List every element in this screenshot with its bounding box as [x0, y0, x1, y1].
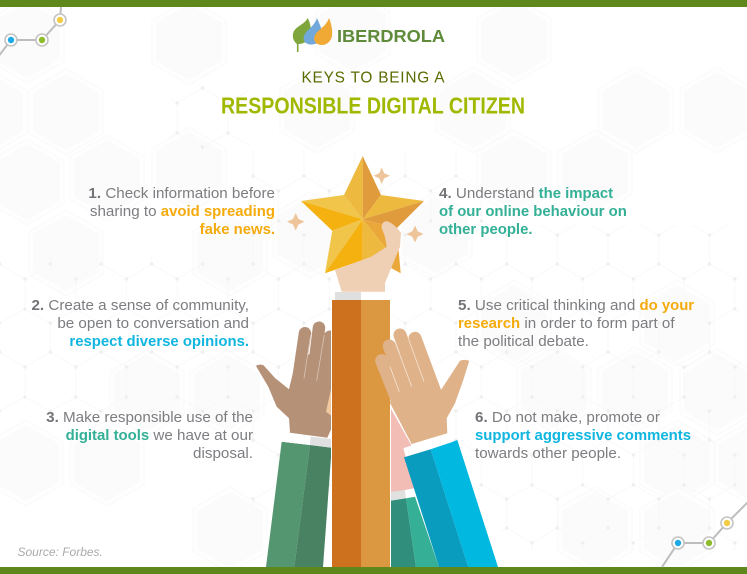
blue sleeve [403, 433, 498, 567]
text block 4: of our online behaviour on [439, 204, 627, 220]
text block 1 [88, 185, 275, 238]
pink forearm [390, 407, 414, 492]
text block 5: the political debate. [458, 333, 589, 350]
text block 2: respect diverse opinions. [69, 334, 249, 350]
icon: leaf and drops [293, 18, 332, 52]
text block 4: other people. [439, 222, 532, 238]
icon: star [301, 156, 424, 273]
peach arm sliver [326, 386, 332, 416]
central orange sleeve [331, 299, 391, 567]
icon: centre hand [335, 221, 401, 292]
text block 3: digital tools we have at our [66, 427, 253, 444]
text block 4: 4. Understand the impact [439, 185, 613, 202]
text block 5: 5. Use critical thinking and do your [458, 297, 694, 314]
text block 1: sharing to avoid spreading [90, 203, 275, 220]
green sleeve [266, 434, 332, 567]
icon: sparkles [287, 168, 424, 242]
text block 4 [439, 185, 627, 238]
text block 5: research in order to form part of [458, 315, 675, 332]
text block 5 [458, 297, 694, 350]
bottom bar [0, 567, 747, 574]
text block 2: 2. Create a sense of community, [31, 297, 249, 314]
source note: Source: Forbes. [18, 545, 103, 559]
title: line one: KEYS TO BEING A [302, 70, 445, 86]
top bar [0, 0, 747, 7]
text block 1: fake news. [200, 222, 275, 238]
text block 3: 3. Make responsible use of the [46, 409, 253, 426]
wordmark: IBERDROLA [337, 26, 446, 46]
text block 3 [46, 409, 253, 462]
icon: peach hand [382, 335, 469, 444]
text block 1: 1. Check information before [88, 185, 275, 202]
text block 3: disposal. [193, 445, 253, 462]
teal sleeve [390, 488, 439, 567]
corner node chain: top left [0, 7, 66, 57]
text block 2: be open to conversation and [57, 315, 249, 332]
illustration: star held by raised hands [256, 156, 498, 567]
text block 6: towards other people. [475, 445, 621, 462]
text block 6 [475, 409, 691, 462]
centre cuff [335, 292, 385, 300]
text block 2 [31, 297, 249, 350]
corner node chain: bottom right [662, 501, 747, 567]
logo: Iberdrola [293, 18, 446, 52]
icon: brown hand [256, 328, 332, 438]
text block 6: 6. Do not make, promote or [475, 409, 660, 426]
text block 6: support aggressive comments [475, 428, 691, 444]
title: line two: RESPONSIBLE DIGITAL CITIZEN [221, 92, 525, 118]
